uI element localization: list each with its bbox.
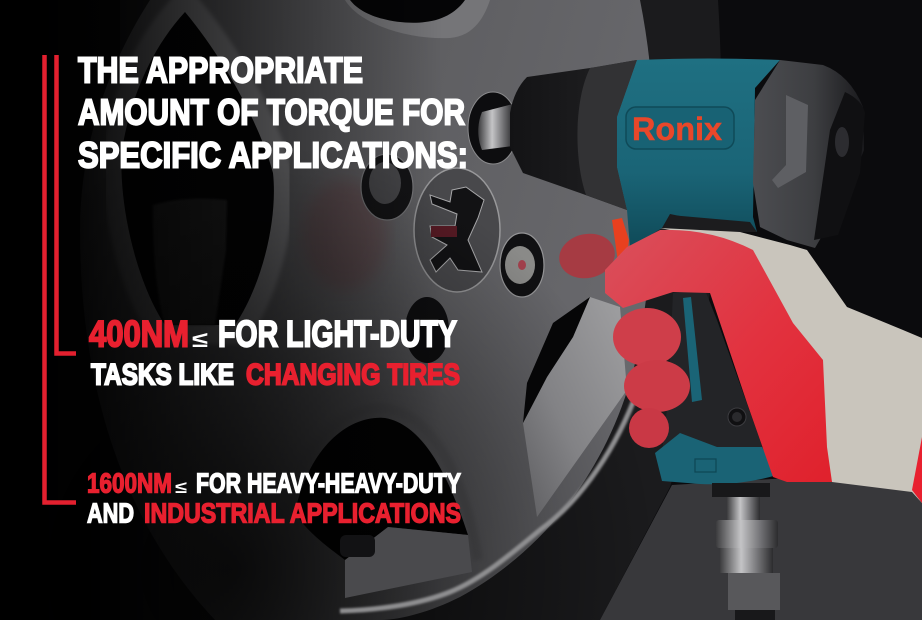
text block: 400NM light duty: CHANGING TIRES [246, 358, 460, 392]
handle [660, 290, 770, 470]
valve [340, 535, 375, 557]
dark strip under body [662, 215, 757, 232]
rim [80, 0, 655, 620]
inner bracket [56, 55, 76, 354]
red reflection [303, 180, 387, 290]
top opening ring [345, 0, 490, 38]
text block: 1600NM heavy duty: 1600NM [87, 468, 172, 498]
red palm [605, 230, 832, 482]
knit glove back [660, 228, 922, 503]
impact wrench [478, 58, 865, 620]
rear grip panel [772, 95, 808, 188]
tire [120, 0, 721, 620]
wheel with tire and rim [80, 0, 721, 620]
title: AMOUNT OF TORQUE FOR [78, 92, 465, 132]
text block: 1600NM heavy duty [87, 468, 461, 528]
top opening [350, 0, 465, 23]
right opening [523, 297, 590, 423]
bottom opening ridge [285, 408, 478, 560]
rear housing [753, 60, 864, 248]
lug nut lower [405, 297, 449, 363]
title [78, 50, 468, 176]
emblem [430, 187, 484, 272]
bottom barrel plane [345, 527, 472, 598]
red cuff [912, 437, 922, 503]
tool nose [510, 60, 637, 210]
rim lit details [340, 297, 634, 611]
finger 2 [613, 308, 681, 366]
left opening [121, 12, 274, 325]
handle screw [728, 408, 746, 426]
lug nut right [500, 233, 544, 297]
gloved hand [555, 228, 922, 503]
left opening surround [121, 12, 274, 325]
text block: 400NM light duty: FOR LIGHT-DUTY [218, 314, 457, 354]
logo panel [626, 107, 734, 149]
lug nut upper [361, 154, 413, 220]
title: THE APPROPRIATE [78, 50, 363, 90]
teal body [617, 58, 780, 248]
text block: 1600NM heavy duty: ≤ [175, 478, 187, 497]
text block: 1600NM heavy duty: AND [87, 498, 134, 528]
floor [600, 470, 922, 620]
text block: 400NM light duty: 400NM [89, 314, 189, 354]
rubber collar [577, 60, 637, 210]
text block: 400NM light duty [89, 314, 460, 392]
teal base [655, 433, 777, 484]
trigger [612, 218, 629, 262]
socket [478, 104, 513, 150]
rim lip highlight [340, 400, 634, 611]
finger 3 [624, 360, 690, 412]
text block: 1600NM heavy duty: INDUSTRIAL APPLICATIONS [144, 498, 461, 528]
bottom opening [295, 418, 468, 560]
red bracket lines [44, 55, 76, 502]
text block: 400NM light duty: ≤ [192, 327, 208, 352]
brake detail [153, 199, 227, 325]
index finger [555, 229, 619, 283]
finger 4 [629, 408, 669, 448]
socket opening [468, 92, 518, 164]
base mark [695, 459, 716, 472]
title: SPECIFIC APPLICATIONS: [78, 134, 468, 176]
rear cap [814, 92, 865, 240]
text block: 400NM light duty: TASKS LIKE [91, 358, 234, 392]
text block: 1600NM heavy duty: FOR HEAVY-HEAVY-DUTY [196, 468, 461, 498]
hub with emblem [414, 168, 500, 292]
logo text: Ronix [632, 111, 722, 147]
right opening plane [523, 297, 627, 517]
handle teal strip [683, 297, 702, 402]
outer bracket [44, 55, 76, 502]
air fitting [712, 483, 780, 620]
